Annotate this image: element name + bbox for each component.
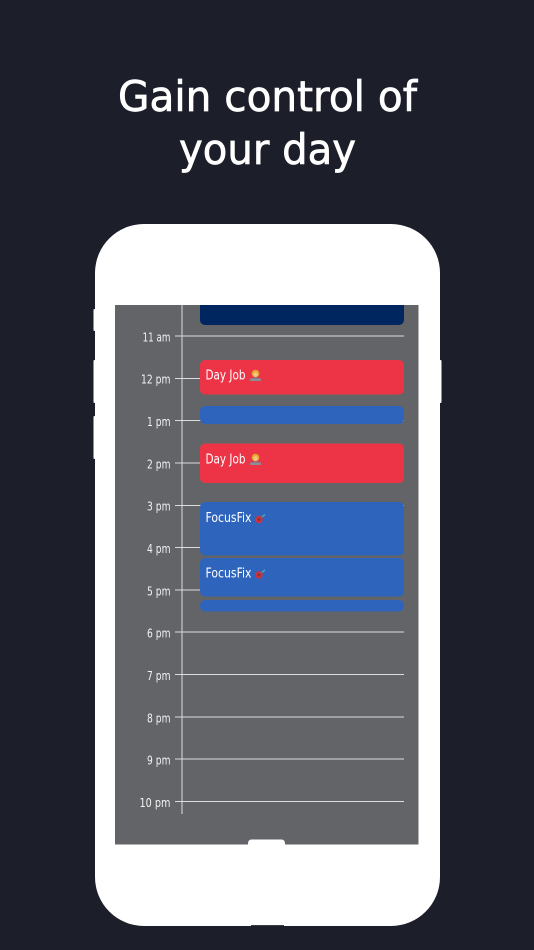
icon: guitar emoji [255, 514, 265, 523]
hour labels: 7 pm [147, 669, 170, 683]
bottom notch [251, 925, 284, 926]
hour labels: 4 pm [147, 542, 170, 556]
title: Gain control of [118, 72, 418, 121]
hour labels: 10 pm [140, 796, 170, 810]
home tab [248, 840, 285, 845]
event: day job 2 [200, 444, 404, 483]
event: navy [200, 305, 404, 325]
icon: technologist emoji [250, 454, 261, 465]
hour labels: 1 pm [147, 415, 170, 429]
hour labels: 11 am [142, 330, 170, 344]
event: blue 1 pm [200, 406, 404, 424]
hour labels: 2 pm [147, 458, 170, 472]
screen [115, 305, 418, 844]
event: day job 2: Day Job [206, 452, 246, 468]
icon: guitar emoji [255, 570, 265, 579]
event: focusfix 2 [200, 558, 404, 596]
event: blue small [200, 600, 404, 612]
hour labels: 12 pm [141, 372, 170, 386]
title [118, 72, 418, 174]
phone body [95, 224, 440, 926]
event: focusfix 1: FocusFix [206, 511, 252, 526]
hour labels: 3 pm [147, 500, 170, 514]
hour labels [140, 330, 170, 810]
title: your day [179, 125, 356, 174]
hour labels: 5 pm [147, 584, 170, 598]
hour labels: 8 pm [147, 712, 170, 726]
hour labels: 6 pm [147, 626, 170, 640]
phone side buttons [94, 309, 442, 459]
event: day job 1: Day Job [206, 368, 246, 384]
event: focusfix 2: FocusFix [206, 566, 252, 582]
phone [94, 224, 442, 926]
event: focusfix 1 [200, 502, 404, 556]
hour grid lines [175, 305, 404, 814]
icon: technologist emoji [250, 370, 261, 381]
hour labels: 9 pm [147, 754, 170, 768]
event: day job 1 [200, 360, 404, 394]
